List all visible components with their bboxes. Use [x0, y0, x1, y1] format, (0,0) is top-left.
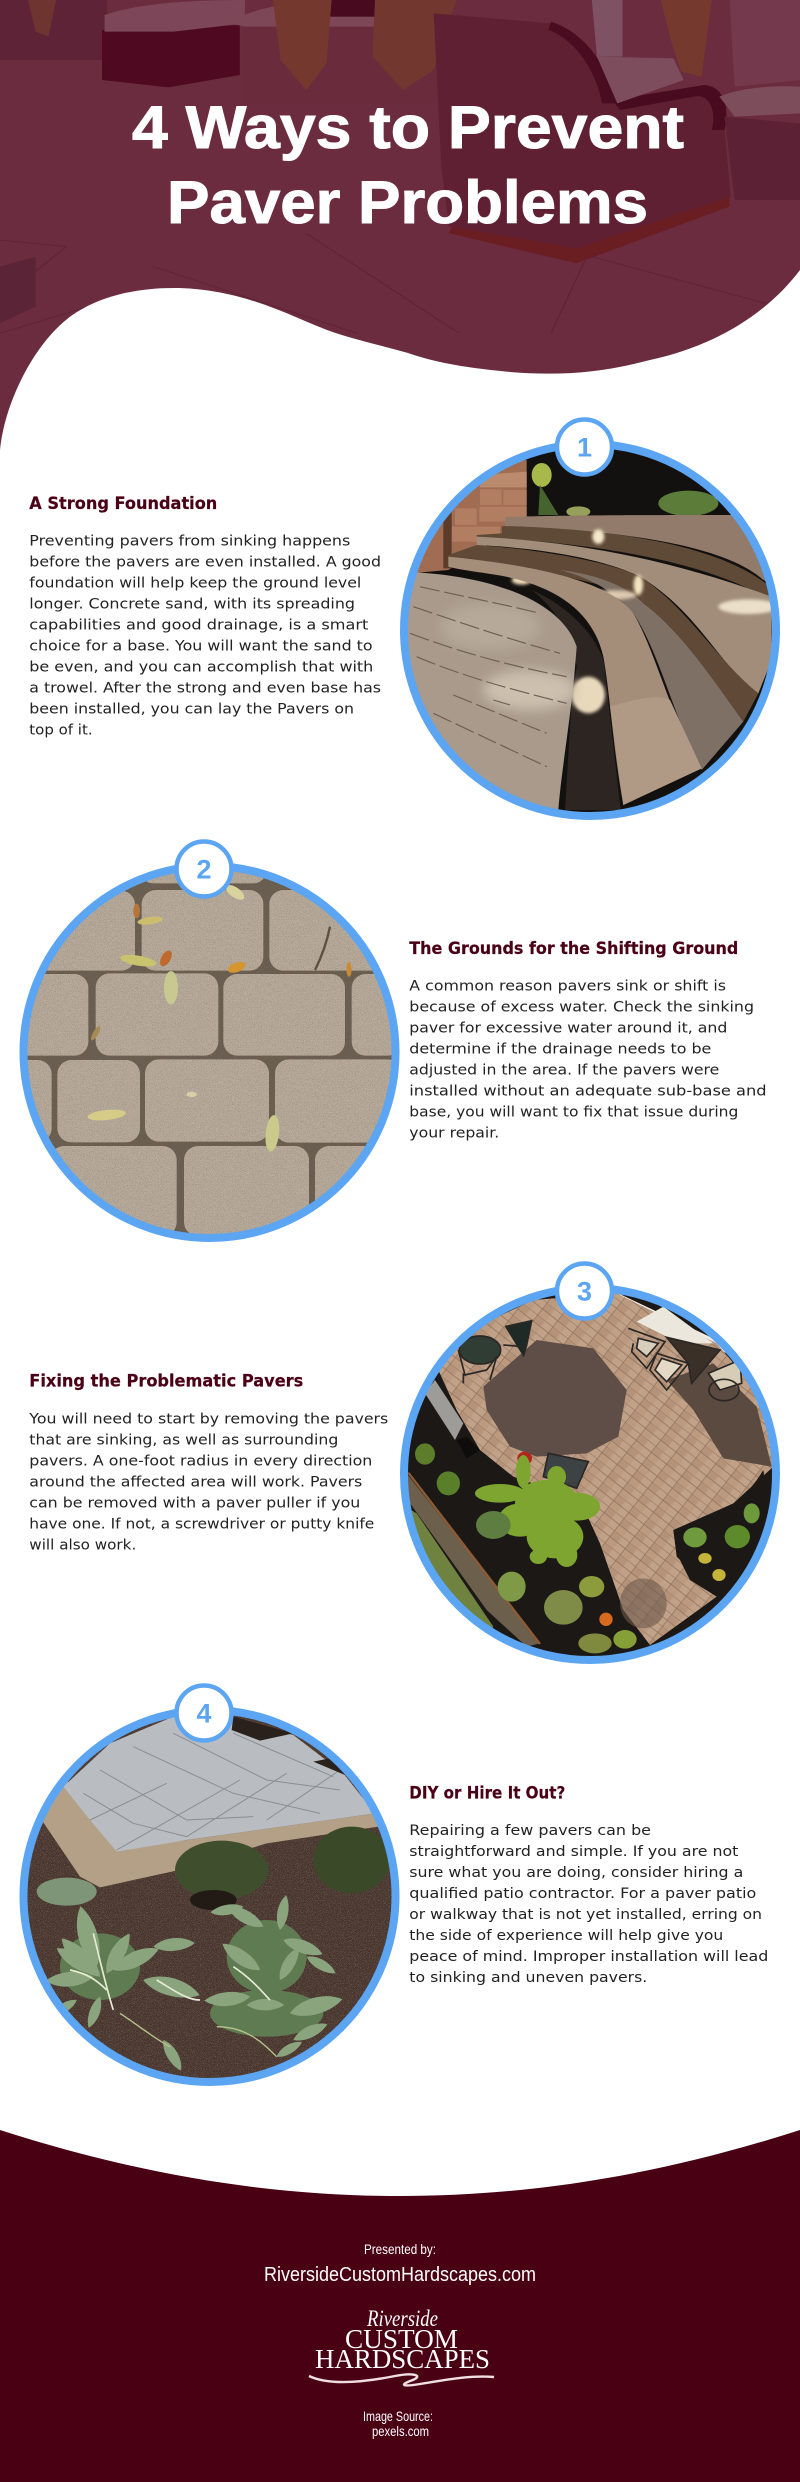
header banner with photo background: [0, 0, 800, 460]
circular photo 2: cobble pavers with leaves: [20, 839, 400, 1242]
image source credit: [363, 2408, 433, 2439]
footer panel: [0, 2130, 800, 2482]
number badge 2: 2: [196, 854, 212, 884]
grass and fence: [412, 1510, 494, 1628]
number badge 1: [557, 420, 612, 474]
circle ring: [404, 444, 776, 816]
hanging vines: [273, 0, 332, 90]
number badge 1: 1: [577, 432, 592, 462]
number badge 3: [557, 1264, 612, 1318]
section 2 text: The Grounds for the Shifting Ground: adjusted in the area. If the pavers were: [409, 1063, 719, 1079]
bench step: [425, 1380, 463, 1440]
section 1 text: A Strong Foundation: Preventing pavers from sinking happens: [29, 534, 350, 550]
company logo: Riverside: [366, 2306, 438, 2331]
shrubs: [175, 1841, 268, 1899]
section 4 text: DIY or Hire It Out?: qualified patio contractor. For a paver patio: [409, 1886, 756, 1902]
riser 1: [476, 526, 769, 596]
circular photo 3: aerial patio view: [400, 1261, 780, 1664]
number badge 4: [176, 1686, 232, 1740]
chairs and tables: [458, 1321, 742, 1488]
image source credit: Image Source:: [363, 2408, 433, 2424]
section 1 text: A Strong Foundation: be even, and you can accomplish that with: [29, 660, 373, 676]
tread 1 in shadow: [560, 570, 743, 770]
umbrella right: [637, 1307, 713, 1343]
section 3 text: Fixing the Problematic Pavers: that are sinking, as well as surrounding: [29, 1432, 338, 1448]
section 1 text: A Strong Foundation: foundation will help keep the ground level: [29, 576, 361, 592]
section 3 text: Fixing the Problematic Pavers: Fixing the Problematic Pavers: [29, 1372, 303, 1392]
section 2 text: The Grounds for the Shifting Ground: determine if the drainage needs to be: [409, 1042, 711, 1058]
circle ring: [24, 866, 396, 1238]
section 1 text: A Strong Foundation: [29, 494, 381, 739]
section 2 text: The Grounds for the Shifting Ground: [409, 939, 767, 1142]
cushion and fire table: [597, 57, 684, 103]
circular photo 4: paver patio with hostas: [20, 1683, 400, 2086]
section 2 text: The Grounds for the Shifting Ground: base, you will want to fix that issue during: [409, 1105, 738, 1121]
company logo: CUSTOM: [345, 2324, 458, 2354]
white corner top left and right: [524, 1304, 525, 1305]
back wall left: [0, 0, 107, 60]
paver field: [63, 1717, 375, 1852]
paver joints: [0, 233, 765, 333]
section 4 text: DIY or Hire It Out?: DIY or Hire It Out?: [409, 1783, 565, 1803]
image source credit: pexels.com: [372, 2423, 429, 2439]
tree: [475, 1455, 600, 1567]
circle ring: [24, 1710, 396, 2082]
section 4 text: DIY or Hire It Out?: or walkway that is not yet installed, erring on: [409, 1907, 762, 1923]
section 3 text: Fixing the Problematic Pavers: [28, 1372, 388, 1553]
section 1 text: A Strong Foundation: before the pavers are even installed. A good: [29, 555, 381, 571]
section 4 text: DIY or Hire It Out?: peace of mind. Improper installation will lead: [409, 1949, 768, 1965]
step cap 2: [477, 537, 772, 693]
company logo: HARDSCAPES: [315, 2344, 490, 2374]
brick wall: [410, 460, 527, 573]
section 2 text: The Grounds for the Shifting Ground: installed without an adequate sub-base and: [409, 1084, 767, 1100]
section 3 text: Fixing the Problematic Pavers: around the affected area will work. Pavers: [29, 1474, 362, 1490]
section 1 text: A Strong Foundation: capabilities and good drainage, is a smart: [29, 618, 369, 634]
section 3 text: Fixing the Problematic Pavers: have one. If not, a screwdriver or putty knife: [29, 1516, 374, 1532]
company logo: [309, 2306, 494, 2385]
section 1 text: A Strong Foundation: longer. Concrete sand, with its spreading: [29, 597, 355, 613]
circle ring: [404, 1288, 776, 1660]
section 1 text: A Strong Foundation: been installed, you can lay the Pavers on: [29, 702, 354, 718]
section 3 text: Fixing the Problematic Pavers: You will need to start by removing the pavers: [28, 1411, 388, 1427]
number badge 2: [176, 842, 232, 896]
hostas: [60, 1920, 323, 2037]
storage bench: [102, 25, 240, 87]
section 2 text: The Grounds for the Shifting Ground: The Grounds for the Shifting Ground: [409, 939, 738, 959]
right shadow: [667, 1363, 772, 1467]
website url: RiversideCustomHardscapes.com: [264, 2264, 536, 2286]
section 4 text: DIY or Hire It Out?: sure what you are doing, consider hiring a: [409, 1865, 743, 1881]
section 4 text: DIY or Hire It Out?: straightforward and simple. If you are not: [409, 1844, 739, 1860]
bushes: [532, 463, 552, 487]
title: [132, 106, 684, 224]
section 1 text: A Strong Foundation: A Strong Foundation: [29, 494, 217, 514]
shrubs: [415, 1443, 435, 1465]
drain channel: [532, 590, 621, 810]
section 3 text: Fixing the Problematic Pavers: will also work.: [29, 1537, 136, 1553]
section 1 text: A Strong Foundation: a trowel. After the strong and even base has: [29, 681, 381, 697]
title: 4 Ways to Prevent: [132, 94, 684, 161]
circular photo 1: curved lit paver steps: [400, 417, 780, 820]
section 4 text: DIY or Hire It Out?: Repairing a few pavers can be: [409, 1823, 651, 1839]
riser 2: [448, 545, 758, 722]
wicker armchair: [434, 13, 731, 253]
section 1 text: A Strong Foundation: choice for a base. You will want the sand to: [29, 639, 373, 655]
tan border: [42, 1780, 378, 1887]
patio: [438, 1293, 773, 1645]
number badge 3: 3: [577, 1276, 592, 1306]
presented by label: Presented by:: [364, 2241, 436, 2257]
section 1 text: A Strong Foundation: top of it.: [29, 723, 93, 739]
front step cap: [448, 557, 702, 805]
section 2 text: The Grounds for the Shifting Ground: your repair.: [409, 1126, 499, 1142]
section 4 text: DIY or Hire It Out?: [409, 1783, 768, 1986]
section 4 text: DIY or Hire It Out?: to sinking and uneven pavers.: [409, 1970, 647, 1986]
leaves: [87, 882, 352, 1152]
section 2 text: The Grounds for the Shifting Ground: A common reason pavers sink or shift is: [409, 979, 726, 995]
stone pillar: [242, 27, 441, 103]
section 4 text: DIY or Hire It Out?: the side of experience will help give you: [409, 1928, 723, 1944]
section 3 text: Fixing the Problematic Pavers: pavers. A one-foot radius in every direction: [29, 1453, 372, 1469]
section 2 text: The Grounds for the Shifting Ground: because of excess water. Check the sinking: [409, 1000, 754, 1016]
number badge 4: 4: [196, 1698, 212, 1728]
leaf shadow on path: [620, 1578, 667, 1628]
title: Paver Problems: [167, 169, 648, 236]
top deck: [505, 515, 766, 581]
section 3 text: Fixing the Problematic Pavers: can be removed with a paver puller if you: [29, 1495, 360, 1511]
section 2 text: The Grounds for the Shifting Ground: paver for excessive water around it, and: [409, 1021, 727, 1037]
umbrella shadow: [483, 1340, 627, 1457]
pavement: [400, 572, 577, 810]
